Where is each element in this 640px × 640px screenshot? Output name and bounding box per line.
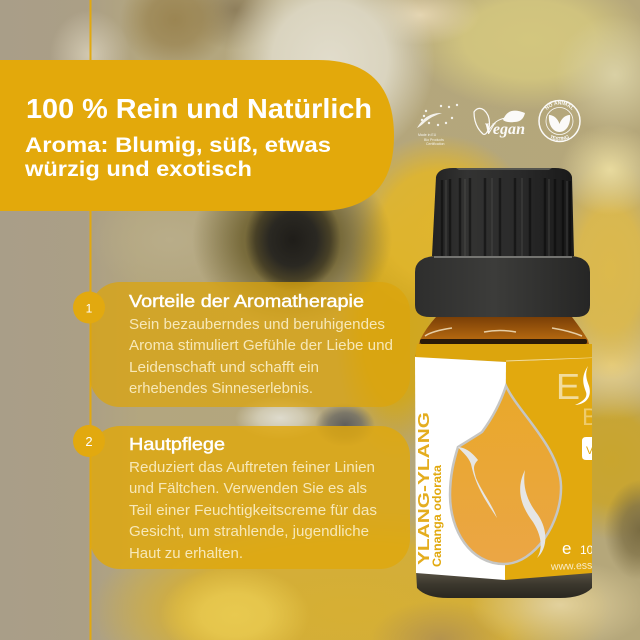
banner panel (0, 60, 394, 211)
text block 2: und Fältchen. Verwenden Sie es als (129, 480, 367, 497)
icon: vegan: Vegan (484, 121, 525, 138)
number badge 2 (73, 425, 105, 457)
text block 1: erhebendes Sinneserlebnis. (129, 380, 313, 397)
icon: EU organic leaf (417, 104, 458, 146)
text block 1: Sein bezauberndes und beruhigendes (129, 316, 385, 333)
heading 2: Hautpflege (129, 434, 225, 454)
drop icon (450, 386, 561, 564)
text block 2: Gesicht, um strahlende, jugendliche (129, 523, 369, 540)
label name: YLANG-YLANG (416, 412, 433, 565)
number badge 2: 2 (85, 434, 93, 449)
icon: EU organic leaf: Bio Products (424, 138, 444, 142)
number badge 1: 1 (86, 302, 93, 316)
icon: no animal testing (538, 100, 581, 142)
label species: Cananga odorata (430, 465, 444, 567)
panel: Hautpflege (73, 425, 410, 569)
text block 1: Leidenschaft und schafft ein (129, 359, 319, 376)
icon: no animal testing: TESTING (550, 134, 569, 140)
brand text: 10 (580, 543, 594, 557)
brand text (550, 366, 592, 570)
bottle glass shoulder (415, 317, 592, 356)
text block 2: Teil einer Feuchtigkeitscreme für das (129, 502, 377, 519)
heading 1: Vorteile der Aromatherapie (129, 291, 364, 311)
cap collar (415, 256, 590, 317)
icon: EU organic leaf: Made in EU (418, 133, 437, 137)
text block 2 (129, 459, 377, 562)
text block 1 (129, 316, 393, 397)
brand text: B (582, 404, 598, 431)
text block 1: Aroma stimuliert Gefühle der Liebe und (129, 337, 393, 354)
brand text: V (586, 445, 594, 457)
text block 2: Reduziert das Auftreten feiner Linien (129, 459, 375, 476)
brand text: e (562, 539, 571, 558)
banner title: 100 % Rein und Natürlich (26, 93, 372, 124)
text block 2: Haut zu erhalten. (129, 545, 243, 562)
banner subtitle (24, 134, 331, 181)
accent vertical line (90, 0, 92, 640)
bottle body top band (415, 344, 592, 362)
label (415, 357, 592, 580)
icon: vegan (474, 108, 525, 138)
number badge 1 (73, 292, 105, 324)
cap (432, 168, 574, 256)
brand text: www.essence (550, 559, 615, 573)
banner subtitle: Aroma: Blumig, süß, etwas (25, 134, 331, 157)
panel: Vorteile der Aromatherapie (73, 282, 410, 407)
bottle (415, 168, 592, 598)
banner subtitle: würzig und exotisch (24, 158, 252, 181)
brand text: E (556, 366, 580, 407)
icon: no animal testing: NO ANIMAL (545, 101, 573, 110)
icon: EU organic leaf: Certification (426, 142, 445, 146)
bottle base (416, 570, 592, 598)
